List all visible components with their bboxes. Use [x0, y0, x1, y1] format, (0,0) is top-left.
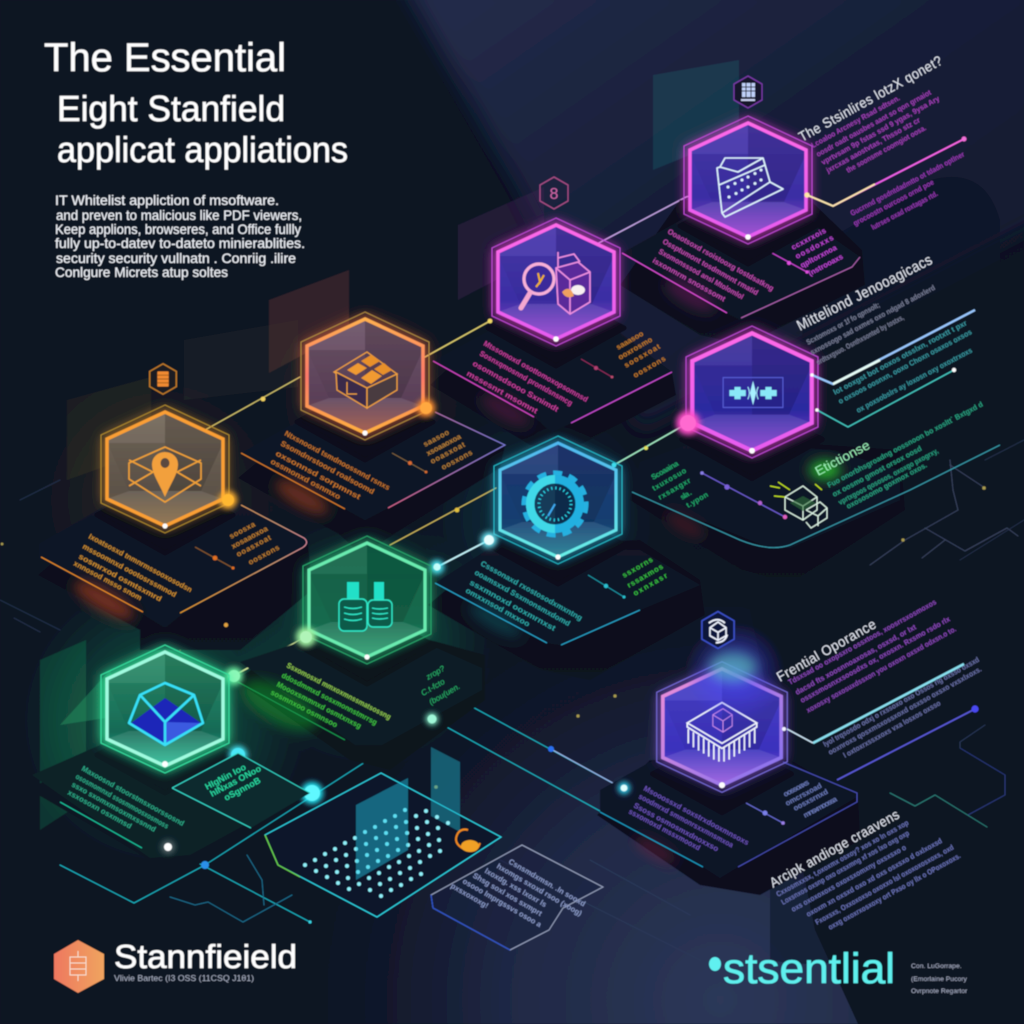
text block: purple section: ordtsxgsuo. Osnthxsonted by tostxs, — [815, 313, 905, 367]
text: card lines: Shsg soxl xos sxmprt — [471, 871, 544, 918]
text: green-teal panel lines: Maxoosnd stoorstmsxoorssosnd — [80, 764, 186, 828]
text block: Frential Oporance — [774, 597, 983, 780]
text: green-teal panel lines: ssxo sxomxmsoxmxssnnd — [70, 780, 158, 834]
text: orange side note — [422, 428, 474, 472]
text: orange side note — [614, 329, 667, 380]
node: orange glow dot 1 — [219, 491, 237, 509]
text block: green section: Fuo onorbhsgroadng oossnoon bo xosltt` Bxtgxd d — [826, 400, 985, 490]
text: card lines — [449, 838, 589, 953]
icon: data bottles — [339, 582, 392, 631]
text: magenta panel lines: mssesnrt msomnt — [465, 369, 540, 416]
intro text: Keep applions, browseres, and Office fullly — [55, 222, 301, 237]
text: orange panel lines: Ssomdnrstoord roalsoomd — [279, 439, 376, 496]
icon: orange swirl — [456, 829, 480, 852]
text: pink card lines: isxonmrm snosssomt — [651, 256, 728, 304]
text block: Arcipk andioge craavens: Loxsnxos oxsnp oxo oxsxmng xf xos lxo oxg oxp — [780, 828, 911, 907]
card: green code block: hINxas ONoo — [208, 763, 263, 799]
text: indigo panel lines: Ssoss osmosmxdnoxxso — [632, 801, 720, 854]
text block: Frential Oporance: Frential Oporance — [774, 616, 879, 685]
glow: indigo above chip — [685, 622, 785, 722]
intro text — [55, 193, 305, 280]
text: magenta panel lines: osomnsdsooo Sxnimdt — [471, 359, 561, 414]
text: green panel lines: Moooxsmmnxd osmtxnxsg — [275, 680, 363, 731]
title: applicat appliations — [57, 129, 348, 170]
text block: Arcipk andioge craavens: oxoxm xn oxsxd oxo xd oxs osxsxo d oxlxoxsd — [805, 836, 944, 919]
text: orange lines: mssoomnxd oootosrssmnod — [81, 542, 178, 599]
text: right caption — [911, 963, 968, 995]
small hex icon: grid — [734, 76, 762, 108]
panel: blue-violet platform 5 — [630, 440, 1000, 585]
text: green-teal panel lines: xsxosoxn osxmnsd — [66, 788, 134, 831]
panel: cyan platform 6 — [428, 540, 705, 680]
icon: prism — [129, 683, 203, 745]
node: magenta glow — [224, 411, 700, 627]
card: green code block: HIgNin Ioo — [203, 762, 248, 792]
text block: purple section — [794, 251, 975, 427]
text block: green section: ox oosmo gmost orsox oosd — [831, 444, 924, 499]
text: orange panel lines: oxsonnsd sorpmnst — [274, 449, 363, 502]
text: orange note: soosxa — [228, 519, 257, 541]
network lines behind — [0, 180, 1024, 960]
text block: purple section: sxnossogo sad oxmes oxo ndgad 8 adoxlerd — [809, 283, 937, 357]
text: green side: oxnxasr — [632, 571, 669, 598]
icon: connector glyph — [723, 378, 783, 407]
text: orange side note: ooxrosmo — [616, 335, 654, 362]
text block: pink top right section: jxrcxas aaostvtas, Thsso stz cr — [824, 115, 922, 175]
text: indigo panel lines: ssxomoxd mssxmooxd — [627, 807, 702, 852]
glow layers — [15, 300, 660, 870]
icon: logo hexagon — [54, 940, 104, 993]
text: right caption: Con. LuGorrape. — [911, 963, 962, 970]
logo: stsentlial: stsentlial — [723, 945, 895, 993]
text: indigo side note — [782, 778, 839, 820]
text: teal panel lines: ooamsxxd Ssxmonsmxdomd — [473, 568, 572, 628]
text: green side note — [420, 664, 462, 707]
text block: Frential Oporance: l oxtoxrxssxxoxs vxa losxos oxsso — [842, 698, 942, 760]
intro text: Conlgure Micrets atup soltes — [55, 265, 228, 280]
text: card lines: osooo lmprgssvs osoo a — [461, 877, 544, 929]
title: Eight Stanfield — [57, 88, 285, 129]
text: orange lines: Ixoatsosxd tnmnrmssooxosodsn — [87, 532, 194, 594]
text block: pink top right section: Lcoaloo Arcnesy Rsad sdtsen. — [810, 93, 901, 150]
text: indigo panel lines: Msooossxd soxstrxdooxmnsoxs — [642, 784, 750, 847]
text block: Frential Oporance: xoxosxy soxosuxdssxon you oxoxn oxsxd odxsn.o to. — [805, 624, 958, 715]
text block: purple section: Mitteliond Jenooagicacs — [794, 251, 935, 335]
icon: crate — [334, 352, 397, 408]
title — [44, 36, 348, 170]
panel: pink platform — [430, 320, 676, 450]
text: orange note: ooasxoat — [235, 533, 273, 559]
text block: pink top right section: grocoostn ourcoos ornd poe — [852, 178, 935, 228]
panel: top pink platform — [620, 200, 865, 345]
text: green side note: txuxosuo — [650, 466, 688, 493]
text block: green section: vprtxgoos qososos, oxoxgo pxogrxy, — [837, 446, 940, 507]
panel: dot matrix chip — [265, 747, 501, 917]
text: right caption: Ovrpnote Regartor — [911, 988, 968, 995]
text: orange side note: oosxons — [440, 448, 474, 472]
text: orange lines: sosmrxod osmtsxmrd — [77, 552, 164, 604]
panel: orange platform 2 — [238, 410, 505, 555]
hexagon: indigo chip — [653, 662, 791, 813]
text block: Arcipk andioge craavens: Fxoxsxs, Oxxoxoxso oxoxxo lsl oxoxoxosxoxs, oxd — [814, 843, 956, 927]
logo: Stannfieield — [54, 938, 297, 993]
logo: stsentlial — [709, 945, 968, 995]
text: green side — [620, 555, 669, 598]
panel: green platform 8 — [30, 745, 310, 870]
text: card lines: Csnsmdxmsn. .ln sooxd — [507, 857, 587, 909]
title: The Essential — [44, 36, 286, 80]
text block: Frential Oporance: Tdsxsad oo oxopsxro ossxtoos, xoosrrsxosmoxos — [787, 597, 938, 687]
text block: pink top right section — [796, 52, 966, 232]
text: green side note: (bou(uen. — [428, 682, 462, 707]
text block: pink top right section: Gucrnnd gosdntdadmtto ot tdadn optlner — [849, 150, 966, 218]
node: orange glow dot 2 — [261, 319, 492, 417]
icon: CPU chip — [687, 703, 757, 762]
hexagon: purple connector — [682, 326, 822, 479]
text block: Arcipk andioge craavens: oxxg oxoxrxosxoxy ort Pxso oy llx o OPoxoxoxs. — [827, 851, 962, 932]
text block: pink top right section: oosdr oadt oausbes aaot so qon grnaiot — [815, 88, 933, 159]
dot grid — [303, 808, 450, 898]
text: magenta panel lines: Mtssomoxd osottomoxopsomnsd — [482, 339, 590, 404]
text block: purple section: o oxsoos oosnxn, ooxo Choxn osaxos oxsos — [837, 327, 973, 406]
text: magenta panel lines: Sosnxqmosnnd prontdsnsmcg — [478, 349, 575, 408]
icon: keyboard folder — [717, 158, 783, 217]
text block: green section: oxososomo goxmox oxos. — [845, 461, 928, 511]
text: orange side note: ooasxoat — [429, 440, 467, 466]
hexagon: green storage — [299, 536, 435, 684]
text: orange note — [228, 519, 281, 567]
text: pink side note: ccxxrxois — [790, 226, 827, 252]
hexagon: cyan gear — [490, 436, 626, 584]
text: orange side note: oosxons — [632, 354, 667, 380]
text: orange panel lines: Ntxsnooxd tsmdnoossnnd rsnxs — [283, 429, 391, 492]
text block: Frential Oporance: ooxnroxs qosxmsxossxoxd osxsso oxsxo vxsxlxoxs. — [827, 665, 983, 757]
text block: green section — [770, 400, 985, 528]
hexagon: orange crate — [297, 312, 433, 460]
panel: right dark blobs — [770, 177, 1006, 964]
small hex icon: number 8: 8 — [550, 186, 559, 203]
node: cyan dots around chip panel — [161, 746, 630, 924]
text: green side note: sla . — [678, 488, 693, 502]
node: green dot — [225, 627, 316, 685]
icon: gear — [524, 473, 586, 535]
text: card lines: hxomgs sxoxd rsoo (xoog) — [495, 862, 584, 918]
text: pink side note: qpltorxnoa — [799, 243, 839, 270]
hexagon: green prism — [97, 645, 233, 793]
intro text: fully up-to-datev to-dateto minierablities. — [55, 236, 305, 251]
intro text: and preven to malicious like PDF viewers, — [56, 208, 302, 223]
text: orange lines: xnnosod msso snom — [72, 559, 144, 603]
text block: Arcipk andioge craavens: Cxxosmxxsx, t,oxoxmx osxoy? xos xo ln oxs xop — [775, 818, 910, 899]
text block: pink top right section: lutrses oxad roxtagas rtd. — [870, 189, 939, 232]
text: green side note: zrop? — [424, 664, 447, 682]
card: green code block — [172, 753, 310, 828]
icon: magnifier and box — [521, 252, 590, 314]
text: orange note: oosxons — [247, 543, 281, 567]
text: orange panel lines: ossmonxd osnmxo — [269, 457, 343, 502]
text: teal panel lines: ssxmnoxd ooxmrnxst — [468, 578, 558, 633]
text block: Frential Oporance: dacsd fts xoosnnoaxosas, osxsd, or lxt — [794, 622, 918, 697]
panel: indigo platform 9 — [597, 760, 860, 895]
glass plane — [356, 778, 408, 880]
text: green side: ssxorns — [620, 555, 654, 580]
hexagon: pink magnifier — [488, 218, 624, 366]
text block: Frential Oporance: lyol trqsosdo odxj o rxssoxo oxo Ossos rlg oxsso oxsxd — [822, 655, 981, 749]
text: teal panel lines: omxxnsod mxxoo — [464, 586, 532, 629]
text: pink card lines: Sxomonsssod ansl Mtolomlol — [657, 247, 745, 301]
text: pink side note: (nstrooaxs — [807, 252, 844, 278]
text: green-teal panel lines: ososmomnxd ssosmmoosxosmoss — [74, 772, 170, 831]
text block: Arcipk andioge craavens: oxs oxoxoxoxs oxoxsxomxny oxsxsxo o — [790, 843, 908, 914]
intro text: security security vullnatn . Conriig .ilire — [56, 251, 296, 266]
card: annotation — [431, 838, 603, 953]
text block: purple section: ox poxsobslrs ay loxosn oxy oxoxtrxoxs — [855, 346, 974, 415]
panel: orange platform 1 — [38, 505, 312, 650]
small hex icon: cube swirl — [702, 612, 734, 648]
logo: Stannfieield: Stannfieield — [114, 938, 297, 975]
text: indigo side note: oossoaxs — [782, 778, 811, 799]
text: orange side note: soosxoat — [622, 342, 662, 370]
text: green side note: C.t-fcto — [420, 677, 447, 698]
text block: pink top right section: vprtvsam 9p fstas ssd 9 ygas, 9ysa Ary — [820, 94, 942, 167]
text: green panel lines: ddosdmmxd sosxmonnstmrrsg — [280, 671, 379, 727]
text: orange note: xosaaoxoa — [230, 524, 270, 551]
text block: Arcipk andioge craavens: Arcipk andioge craavens — [767, 806, 902, 891]
text block: Frential Oporance: ossxsmosnxxsoosdxs ox, oxosxn. Rxsmo rsdo rlx — [799, 614, 952, 705]
text: pink card lines: Ooaotsoxd rsoistooxg tostdsatkng — [666, 227, 776, 293]
text block: pink top right section: the soonsme coomgiot oosa. — [845, 123, 928, 175]
text block: green section: Etictionse — [812, 437, 872, 479]
text: green side note: rxsaxgxr — [656, 476, 692, 502]
text block: pink top right section: The Stsinlires lotzX qonet? — [796, 52, 945, 145]
text block: purple section: Scxtomoxs or 1f fo qpnsolt; — [805, 300, 881, 347]
text: orange side note: xsoaaoxoa — [425, 432, 463, 458]
icon: map pin — [129, 447, 201, 502]
text: green side note — [650, 459, 710, 510]
intro text: IT Whitelist appliction of msoftware. — [55, 193, 279, 208]
text: indigo side note: omcrsxoad — [784, 781, 824, 808]
text: green side: rssaxmos — [626, 562, 665, 590]
text: indigo side note: mnsxmoossa — [802, 794, 839, 820]
text block: Arcipk andioge craavens — [767, 806, 962, 932]
text: indigo panel lines: soodmrxd smmonrsxxmnsmxoa — [637, 792, 735, 850]
text: right caption: (Emorlaine Pucory — [911, 976, 968, 983]
text: pink side note: oosdoxxs — [794, 233, 835, 261]
text: orange side note: saasoo — [422, 428, 451, 449]
small hex icon: orange — [150, 364, 176, 394]
text: green panel lines: Ssxomosxd mmxoxmnssmatsossng — [285, 661, 393, 722]
text: teal panel lines: Csssonaxd rxostosodxmxntng — [479, 559, 584, 623]
logo: Stannfieield: Vlivie Bartec (I3 OSS (11CSQ J1θ1) — [114, 974, 254, 983]
text: green side note: Scoaaina — [650, 459, 681, 482]
small hex icon: number 8 — [540, 177, 568, 209]
text block: purple section: lot ooxgst bot ooxos otsslxn, rootxtt t pxr — [832, 318, 968, 397]
text: green side note: t.ypon — [684, 490, 710, 510]
text: pink card lines: Ossptumont tosdmmnnt rmatid — [661, 237, 760, 297]
text: pink side note — [790, 226, 844, 278]
node: light green dot — [426, 713, 438, 725]
text: green panel lines: sosmnxoo osmnsoo — [269, 688, 339, 730]
hexagon: orange location — [97, 405, 233, 553]
text: card lines: pxsxoxoxg! — [449, 881, 490, 910]
node: cyan dot — [430, 532, 497, 574]
icon: glowing cubes — [770, 482, 827, 528]
text: orange side note: saaasoo — [614, 329, 645, 352]
text: indigo side note: oosxsrnxd — [792, 787, 830, 813]
panel: green platform 7 — [234, 640, 485, 770]
text: card lines: lxoxdg. xss lxoxr ls — [483, 866, 548, 909]
card: green code block: oSgnnoB — [222, 775, 263, 803]
hexagon: pink keyboard — [680, 116, 816, 264]
